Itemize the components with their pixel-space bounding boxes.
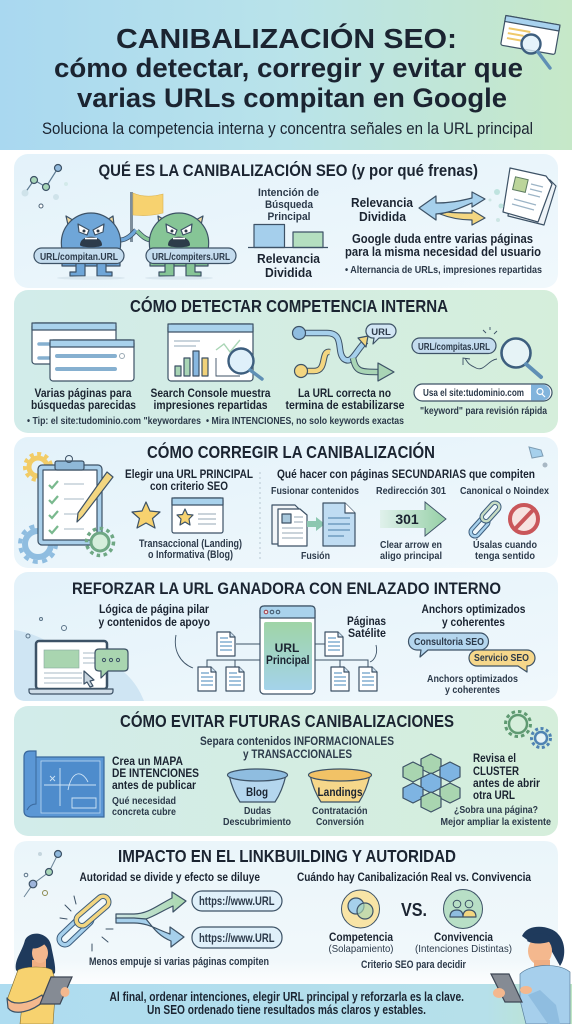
icon: documents	[488, 168, 556, 225]
panel: impacto en linkbuilding	[14, 841, 558, 990]
icon: star	[132, 502, 160, 528]
caption 1: Varias páginas para	[34, 386, 132, 400]
text: separa contenidos	[200, 736, 394, 761]
icon: url and magnifier: URL/compitas.URL	[418, 341, 490, 353]
title	[54, 23, 523, 113]
icon: blog bowl	[228, 769, 288, 802]
heading: REFORZAR LA URL GANADORA CON ENLAZADO INTERNO	[72, 579, 501, 598]
text: revisa el cluster: CLUSTER	[473, 764, 519, 778]
text: revisa el cluster: ¿Sobra una página?	[454, 804, 538, 816]
icon: laptop with chat bubble	[14, 618, 144, 701]
text: página pilar: Lógica de página pilar	[99, 602, 209, 616]
text: mapa de intenciones: Crea un MAPA	[112, 754, 183, 768]
icon: overlap circles	[342, 890, 380, 928]
url pill bottom: https://www.URL	[199, 933, 274, 945]
label: competencia: Competencia	[329, 930, 393, 944]
icon: window with star	[172, 498, 223, 533]
text: anchors heading	[422, 602, 526, 629]
caption: blog	[223, 805, 291, 828]
caption: úsalas: Úsalas cuando	[473, 538, 537, 551]
caption: anchors: Anchors optimizados	[427, 673, 518, 685]
icon: search console chart	[168, 324, 262, 381]
text: cuándo: Cuándo hay Canibalización Real vs. Convivencia	[297, 870, 531, 884]
icon: blue monster	[57, 213, 136, 280]
panel: qué es la canibalización	[14, 154, 558, 288]
text: elegir url principal	[125, 467, 253, 493]
arrow: split authority	[116, 892, 186, 947]
icon: chain link	[475, 507, 495, 532]
panel: cómo evitar	[14, 706, 558, 836]
icon: blueprint map	[24, 751, 104, 817]
bar chart	[248, 187, 328, 280]
icon: browser with magnifier	[501, 16, 560, 68]
text: página pilar: y contenidos de apoyo	[98, 615, 210, 629]
url pill 1	[34, 248, 124, 264]
text: google duda: • Alternancia de URLs, impresiones repartidas	[345, 264, 542, 276]
icon: broken chain	[60, 896, 113, 951]
text: mapa de intenciones	[112, 754, 199, 818]
diagram: pillar page and satellites	[175, 606, 377, 694]
url pill top	[192, 891, 282, 911]
panel: cómo corregir	[14, 437, 558, 568]
caption: blog: Dudas	[244, 805, 271, 817]
header band	[0, 0, 572, 150]
arrow: redirección 301: 301	[395, 511, 419, 527]
text: separa contenidos: y TRANSACCIONALES	[243, 749, 352, 761]
panel: reforzar url ganadora	[14, 572, 558, 701]
text: elegir url principal: Elegir una URL PRINCIPAL	[125, 467, 253, 481]
caption: blog: Descubrimiento	[223, 816, 291, 828]
text: autoridad: Autoridad se divide y efecto se diluye	[80, 870, 260, 884]
icon: blog bowl: Blog	[246, 785, 268, 799]
illustration: woman with tablet	[7, 934, 72, 1024]
caption: úsalas	[473, 538, 537, 562]
icon: landings bowl: Landings	[318, 785, 363, 799]
footer text	[110, 990, 464, 1017]
title: cómo detectar, corregir y evitar que	[54, 53, 523, 83]
text: mapa de intenciones: concreta cubre	[112, 806, 176, 818]
icon: clipboard with gears	[20, 454, 114, 562]
caption 2	[150, 386, 271, 412]
label: convivencia: Convivencia	[434, 930, 493, 944]
label: páginas satélite: Páginas	[347, 614, 386, 628]
arrow: redirección 301	[380, 502, 446, 536]
text: vs: VS.	[401, 900, 427, 920]
text: elegir url principal: con criterio SEO	[150, 479, 228, 493]
url pill 2: URL/compiters.URL	[152, 251, 230, 263]
heading: CÓMO CORREGIR LA CANIBALIZACIÓN	[147, 441, 435, 462]
heading: CÓMO DETECTAR COMPETENCIA INTERNA	[130, 295, 448, 316]
subtitle: Soluciona la competencia interna y concentra señales en la URL principal	[42, 120, 533, 138]
label: url principal: Principal	[266, 653, 310, 667]
label: convivencia	[415, 930, 512, 955]
text: anchors heading: Anchors optimizados	[422, 602, 526, 616]
icon: trend dots	[24, 850, 62, 897]
footer text: Al final, ordenar intenciones, elegir URL principal y reforzarla es la clave.	[110, 990, 464, 1004]
bubble: servicio seo	[469, 650, 535, 672]
text: relevancia dividida: Relevancia	[351, 196, 414, 210]
caption: anchors: y coherentes	[445, 684, 500, 696]
label: competencia	[328, 930, 394, 955]
caption: landings: Contratación	[312, 805, 368, 817]
label: url principal: URL	[275, 641, 299, 655]
bar chart: Relevancia	[257, 252, 321, 266]
bar chart: Dividida	[265, 266, 313, 280]
caption 2: Search Console muestra	[150, 386, 271, 400]
labels: three options: Redirección 301	[376, 485, 446, 497]
text: revisa el cluster: Mejor ampliar la existente	[440, 816, 551, 828]
text: mapa de intenciones: Qué necesidad	[112, 795, 176, 807]
label: url principal	[266, 641, 310, 667]
text: separa contenidos: Separa contenidos INFORMACIONALES	[200, 736, 394, 748]
icon: flag	[130, 192, 163, 242]
text: revisa el cluster	[440, 751, 551, 828]
icon: split arrows	[419, 192, 485, 225]
caption 3: La URL correcta no	[298, 386, 391, 400]
caption 3	[286, 386, 405, 412]
caption: transaccional	[139, 538, 242, 561]
panel: cómo detectar	[14, 290, 558, 433]
caption 1	[31, 386, 136, 412]
caption: úsalas: tenga sentido	[475, 550, 535, 562]
icon: landings bowl	[308, 769, 372, 802]
text: anchors heading: y coherentes	[442, 615, 505, 629]
bubble: consultoría seo: Consultoria SEO	[414, 636, 484, 648]
icon: gears	[506, 712, 550, 748]
text: keyword: "keyword" para revisión rápida	[420, 405, 547, 417]
search bar	[414, 384, 552, 401]
icon: url and magnifier	[412, 327, 541, 377]
icon: overlapping windows	[32, 323, 134, 381]
url pill bottom	[192, 927, 282, 948]
tips: • Tip: el site:tudominio.com "keywordares	[27, 416, 201, 427]
title: varias URLs compitan en Google	[77, 83, 507, 113]
icon: route arrows	[292, 324, 396, 381]
labels: three options	[271, 485, 549, 497]
url pill top: https://www.URL	[199, 896, 274, 908]
caption: clear arrow	[380, 539, 442, 562]
caption: anchors	[427, 673, 518, 696]
bar chart: Búsqueda	[265, 199, 314, 211]
caption: menos empuje: Menos empuje si varias páginas compiten	[89, 956, 269, 968]
illustration: man with tablet	[491, 927, 570, 1024]
title: CANIBALIZACIÓN SEO:	[116, 23, 457, 54]
footer text: Un SEO ordenado tiene resultados más claros y estables.	[147, 1003, 426, 1017]
icon: green monster	[137, 213, 213, 280]
bar chart: Intención de	[258, 187, 319, 199]
label: convivencia: (Intenciones Distintas)	[415, 943, 512, 955]
icon: hexagon cluster	[403, 754, 460, 812]
text: revisa el cluster: antes de abrir	[473, 776, 540, 790]
caption: landings: Conversión	[316, 816, 364, 828]
bar chart: Principal	[268, 211, 310, 223]
text: revisa el cluster: Revisa el	[473, 751, 516, 765]
text: google duda	[345, 232, 542, 276]
search bar: Usa el site:tudominio.com	[423, 388, 524, 399]
heading: IMPACTO EN EL LINKBUILDING Y AUTORIDAD	[118, 846, 456, 866]
text: mapa de intenciones: DE INTENCIONES	[112, 766, 199, 780]
label: páginas satélite	[347, 614, 386, 640]
icon: decor blob	[529, 447, 548, 468]
bubble: servicio seo: Servicio SEO	[474, 652, 529, 664]
caption 2: impresiones repartidas	[154, 398, 268, 412]
text: google duda: para la misma necesidad del usuario	[345, 245, 541, 259]
text: revisa el cluster: otra URL	[473, 788, 515, 802]
caption: clear arrow: aligo principal	[380, 550, 442, 562]
heading: QUÉ ES LA CANIBALIZACIÓN SEO (y por qué frenas)	[98, 161, 478, 180]
label: competencia: (Solapamiento)	[328, 943, 394, 955]
labels: three options: Canonical o Noindex	[460, 485, 549, 497]
text: relevancia dividida: Dividida	[359, 210, 407, 224]
bubble: consultoría seo	[408, 633, 488, 657]
text: relevancia dividida	[351, 196, 414, 224]
labels: three options: Fusionar contenidos	[271, 485, 359, 497]
caption: landings	[312, 805, 368, 828]
icon: trend line	[22, 164, 68, 208]
icon: route arrows: URL	[371, 327, 391, 338]
icon: no sign	[510, 505, 538, 533]
footer band	[0, 984, 572, 1024]
caption: transaccional: Transaccional (Landing)	[139, 538, 242, 550]
icon: people circle	[444, 890, 482, 928]
caption: criterio: Criterio SEO para decidir	[361, 959, 467, 971]
text: página pilar	[98, 602, 210, 629]
text: mapa de intenciones: antes de publicar	[112, 778, 196, 792]
caption: clear arrow: Clear arrow en	[380, 539, 442, 551]
caption 1: búsquedas parecidas	[31, 398, 136, 412]
url pill 1: URL/compitan.URL	[40, 251, 118, 263]
caption 3: termina de estabilizarse	[286, 398, 405, 412]
tips: • Mira INTENCIONES, no solo keywords exactas	[206, 416, 404, 427]
url pill 2	[146, 248, 236, 264]
heading: CÓMO EVITAR FUTURAS CANIBALIZACIONES	[120, 710, 454, 731]
caption: transaccional: o Informativa (Blog)	[148, 549, 233, 561]
text: google duda: Google duda entre varias páginas	[352, 232, 533, 246]
icon: merge documents: Fusión	[301, 550, 330, 562]
label: páginas satélite: Satélite	[348, 626, 386, 640]
icon: merge documents	[272, 503, 355, 562]
tips	[27, 416, 404, 427]
